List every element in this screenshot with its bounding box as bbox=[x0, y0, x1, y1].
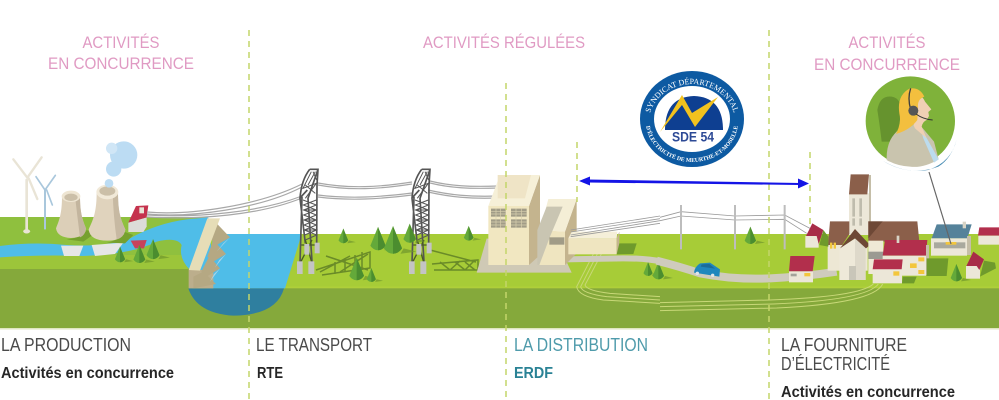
icon: far houses bbox=[951, 227, 999, 281]
icon: underground cables bbox=[660, 284, 883, 311]
dome bbox=[665, 96, 723, 130]
icon: dam bbox=[189, 218, 230, 288]
icon: church tower bbox=[849, 174, 871, 235]
icon: river bbox=[0, 217, 213, 270]
icon: road bbox=[563, 258, 662, 262]
icon: wind turbine white bbox=[13, 157, 42, 233]
heading: activités régulées: ACTIVITÉS RÉGULÉES bbox=[423, 33, 585, 52]
power lines high voltage bbox=[147, 181, 498, 218]
icon: annex bbox=[568, 232, 637, 254]
icon: car bbox=[694, 263, 720, 277]
icon: houses bbox=[789, 223, 948, 283]
label: la fourniture: LA FOURNITURE bbox=[781, 335, 907, 355]
label: le transport bbox=[256, 335, 372, 382]
label: le transport: RTE bbox=[257, 365, 283, 382]
arrow: SDE 54 scope bbox=[579, 176, 809, 188]
neck and face bbox=[908, 95, 931, 138]
icon: pylon 1 bbox=[297, 169, 320, 274]
icon: small plant bbox=[128, 205, 148, 232]
icon: main building bbox=[488, 175, 540, 265]
icon: cooling tower 2 bbox=[89, 185, 133, 243]
pylon shadows bbox=[316, 250, 478, 275]
icon: utility poles bbox=[660, 205, 810, 249]
hair bbox=[896, 88, 924, 134]
icon: customer building bbox=[931, 222, 972, 256]
icon: steam bbox=[105, 141, 137, 188]
icon: lake depth bbox=[188, 288, 284, 316]
heading: activités en concurrence left: EN CONCURRENCE bbox=[48, 54, 194, 73]
callout line bbox=[929, 172, 951, 244]
label: la production: LA PRODUCTION bbox=[1, 335, 131, 355]
trees bbox=[115, 239, 170, 263]
heading: activités en concurrence right bbox=[814, 33, 960, 74]
logo name: SDE 54 bbox=[672, 130, 714, 144]
dashed dividers bbox=[249, 30, 810, 400]
icon: road bbox=[657, 261, 837, 279]
trees bbox=[339, 224, 673, 282]
landscape ground bbox=[0, 217, 999, 330]
icon: power station shadow bbox=[477, 238, 572, 273]
icon: church bbox=[828, 221, 919, 280]
icon: pylon 2 bbox=[409, 169, 432, 274]
village scene bbox=[657, 174, 999, 311]
body bbox=[887, 125, 939, 167]
headset bbox=[909, 88, 911, 109]
logo: SDE 54 bbox=[640, 71, 744, 167]
label: la production: Activités en concurrence bbox=[1, 365, 174, 382]
cables from station bbox=[571, 216, 660, 237]
heading: activités en concurrence right: ACTIVITÉS bbox=[848, 33, 926, 52]
distribution scene bbox=[339, 175, 673, 303]
label: le transport: LE TRANSPORT bbox=[256, 335, 372, 355]
heading: activités en concurrence left bbox=[48, 33, 194, 73]
icon: tree bbox=[745, 227, 765, 244]
heading: activités en concurrence left: ACTIVITÉS bbox=[82, 33, 160, 52]
icon: underground cables bbox=[577, 254, 660, 303]
icon: second building bbox=[537, 199, 577, 265]
icon: lake bbox=[207, 234, 302, 288]
label: la distribution: ERDF bbox=[514, 365, 553, 382]
label: la distribution: LA DISTRIBUTION bbox=[514, 335, 648, 355]
label: la fourniture bbox=[781, 335, 955, 400]
heading: activités en concurrence right: EN CONCURRENCE bbox=[814, 55, 960, 74]
icon: cooling tower 1 bbox=[56, 191, 95, 242]
icon: wind turbine blue bbox=[36, 175, 55, 229]
lightning bolt bbox=[660, 95, 718, 132]
logo bottom ring text: D'ÉLECTRICITÉ DE MEURTHE-ET-MOSELLE bbox=[646, 126, 738, 162]
label: la production bbox=[1, 335, 174, 382]
icon: tower reflections bbox=[61, 243, 123, 256]
icon: operator with headset bbox=[866, 76, 957, 171]
shadow figure bbox=[877, 96, 902, 142]
label: la fourniture: D’ÉLECTRICITÉ bbox=[781, 354, 890, 374]
icon: house reflection bbox=[131, 240, 147, 248]
label: la distribution bbox=[514, 335, 648, 382]
production scene bbox=[0, 141, 302, 316]
logo top ring text: SYNDICAT DÉPARTEMENTAL bbox=[646, 77, 738, 112]
